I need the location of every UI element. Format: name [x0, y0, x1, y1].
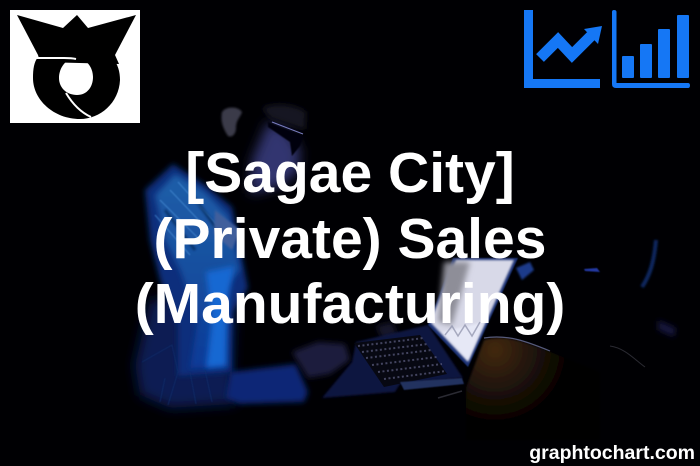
title: (Manufacturing): [135, 272, 565, 336]
photo: laptop base and keyboard: [322, 325, 464, 398]
photo: blue shirt: [145, 164, 248, 376]
photo: dim background lights: [516, 240, 676, 367]
photo: faint shirt folds lower left: [142, 345, 212, 405]
photo: hands: [292, 322, 398, 378]
photo: table edge highlight: [484, 337, 550, 351]
emblem white swirl lines: [36, 58, 91, 117]
logo: city emblem: [10, 10, 140, 123]
watermark: graphtochart.com: [529, 442, 695, 464]
emblem crown: [17, 15, 136, 64]
photo: warm table surface: [466, 338, 600, 440]
title: [135, 141, 565, 336]
photo: head and face: [221, 105, 306, 194]
emblem ring: [33, 57, 120, 119]
icon: line chart with rising arrow: [524, 10, 602, 88]
photo: sleeve: [226, 364, 308, 404]
title: [Sagae City]: [185, 141, 515, 205]
photo: navy lower shirt body: [135, 300, 236, 408]
icon: bar chart: [612, 10, 690, 88]
photo: laptop screen: [428, 258, 518, 367]
title: (Private) Sales: [154, 207, 546, 271]
